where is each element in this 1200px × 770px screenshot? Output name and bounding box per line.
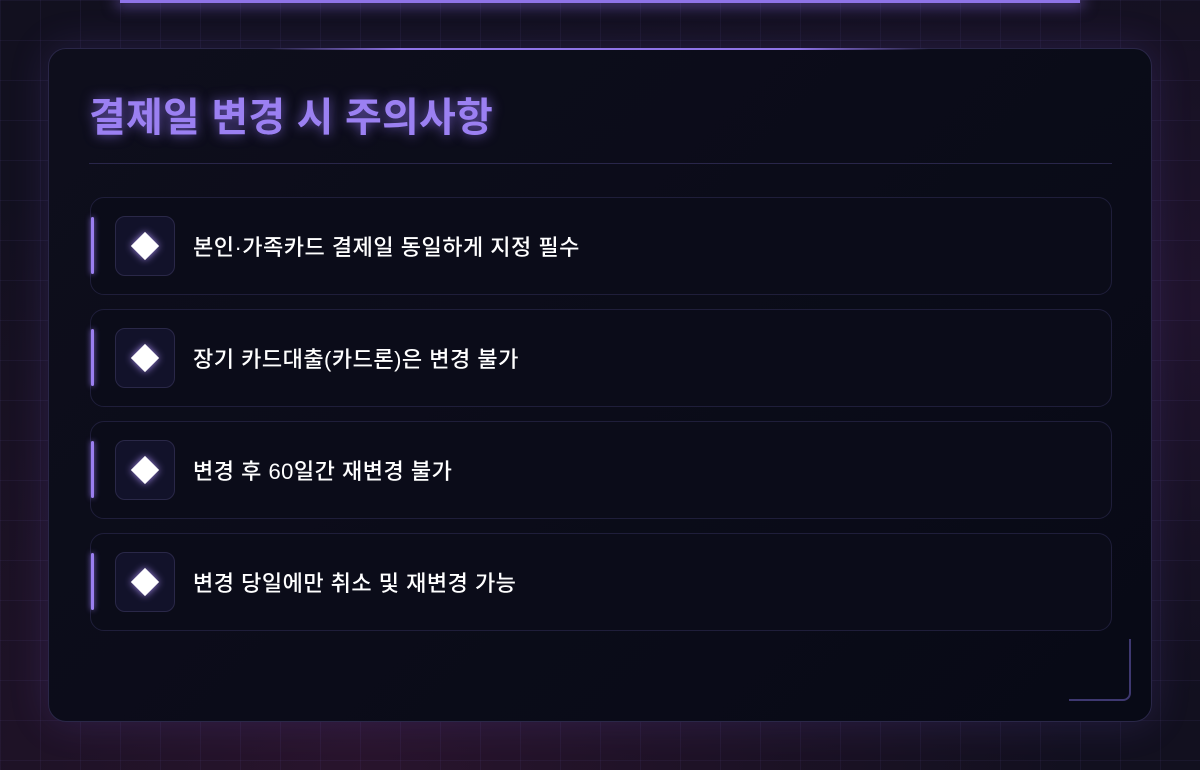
item 1 [90,197,1112,295]
text: item 1: 본인·가족카드 결제일 동일하게 지정 필수 [193,235,580,260]
icon: diamond [115,552,175,612]
title: 결제일 변경 시 주의사항 [89,96,493,140]
text: item 2: 장기 카드대출(카드론)은 변경 불가 [193,347,519,372]
item 2 [90,309,1112,407]
icon: diamond [115,328,175,388]
item 4 [90,533,1112,631]
text: item 3: 변경 후 60일간 재변경 불가 [193,459,452,484]
text: item 4: 변경 당일에만 취소 및 재변경 가능 [193,571,516,596]
icon: diamond [115,216,175,276]
icon: diamond [115,440,175,500]
item 3 [90,421,1112,519]
